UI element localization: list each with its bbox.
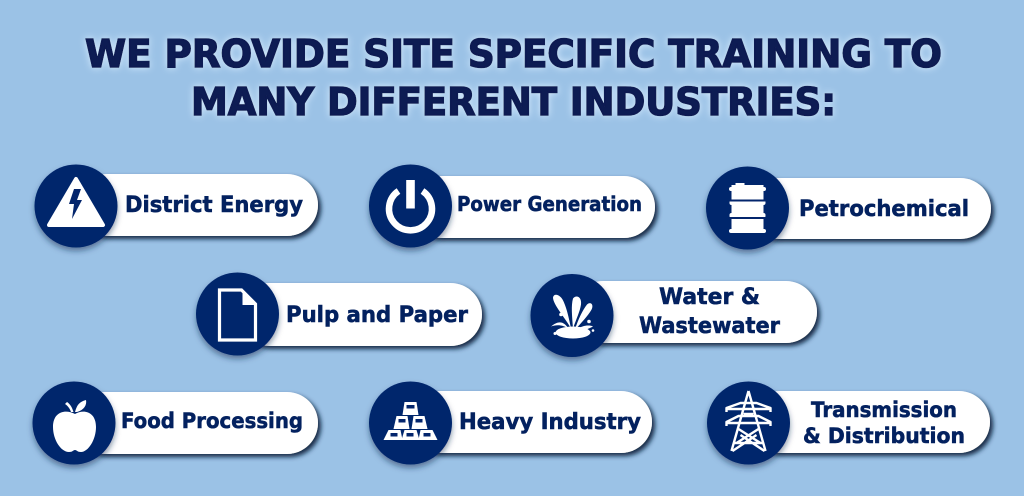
icon: power symbol: [389, 180, 432, 230]
label: Food Processing: Food Processing: [121, 409, 303, 433]
label: Heavy Industry: Heavy Industry: [459, 410, 641, 435]
label: Water & Wastewater: [639, 285, 780, 339]
panel: Heavy Industry: [369, 382, 652, 464]
label: Water & Wastewater: Water &: [659, 285, 760, 310]
label: Transmission & Distribution: Transmission: [811, 398, 957, 422]
label: Transmission & Distribution: & Distribution: [803, 424, 965, 448]
icon: oil barrel: [729, 183, 766, 233]
icon: warning triangle with lightning bolt: [49, 179, 103, 225]
title: WE PROVIDE SITE SPECIFIC TRAINING TO: [85, 32, 942, 76]
panel: Pulp and Paper: [196, 272, 482, 356]
label: Petrochemical: Petrochemical: [799, 197, 969, 222]
panel: Water & Wastewater: [530, 274, 817, 357]
icon: apple: [53, 400, 96, 452]
label: Transmission & Distribution: [803, 398, 965, 448]
label: District Energy: District Energy: [125, 193, 303, 218]
panel: District Energy: [34, 164, 318, 248]
panel: Transmission & Distribution: [707, 382, 990, 464]
label: Pulp and Paper: Pulp and Paper: [286, 303, 468, 328]
panel: Food Processing: [32, 382, 318, 464]
label: Power Generation: Power Generation: [457, 192, 642, 216]
icon: paper sheet: [220, 290, 256, 340]
panel: Power Generation: [369, 164, 655, 248]
icon: transmission tower: [726, 391, 770, 451]
icon: stacked metal ingots: [384, 402, 438, 440]
label: Water & Wastewater: Wastewater: [639, 314, 780, 339]
icon: water splash: [551, 295, 594, 338]
title: MANY DIFFERENT INDUSTRIES:: [191, 80, 836, 124]
panel: Petrochemical: [706, 166, 991, 250]
title: [85, 32, 942, 124]
